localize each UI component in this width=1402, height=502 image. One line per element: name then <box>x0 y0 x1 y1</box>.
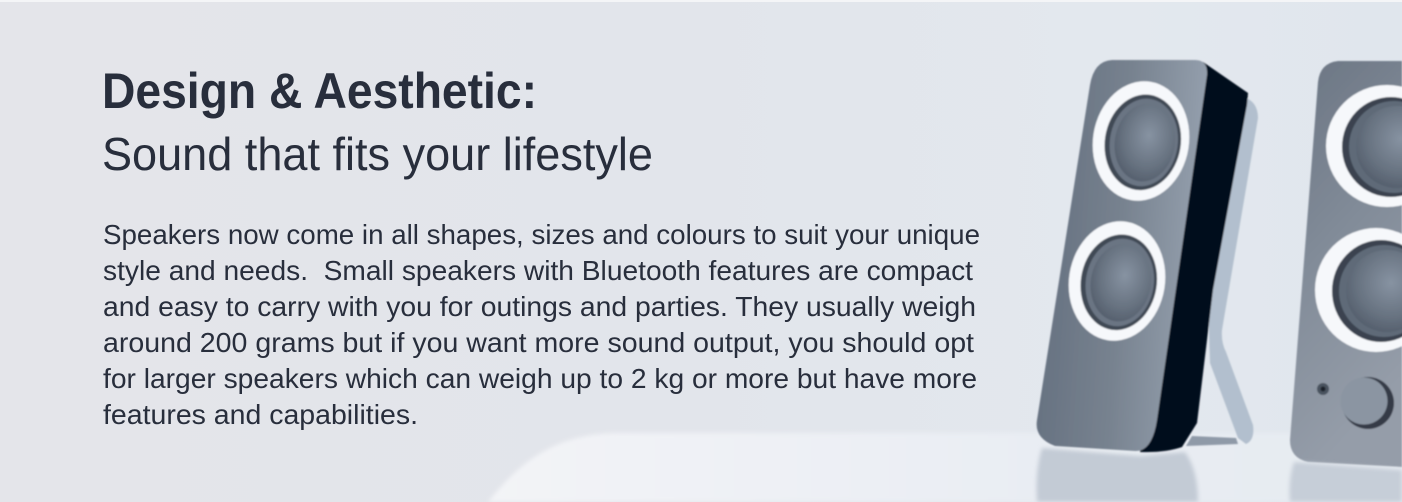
right speaker body <box>1290 61 1402 467</box>
upper driver <box>1326 85 1402 207</box>
speaker side panel <box>1140 62 1248 452</box>
body text: around 200 grams but if you want more sound output, you should opt <box>103 327 974 358</box>
title: Design & Aesthetic: <box>102 63 537 119</box>
table surface <box>488 433 1402 502</box>
volume knob <box>1340 377 1394 429</box>
body text: features and capabilities. <box>103 399 418 430</box>
subtitle: Sound that fits your lifestyle <box>102 128 653 180</box>
right speaker reflection <box>1290 462 1402 502</box>
audio jack <box>1317 383 1329 395</box>
lower driver <box>1060 214 1174 348</box>
upper driver <box>1084 74 1198 208</box>
body text: for larger speakers which can weigh up to 2 kg or more but have more <box>103 363 977 394</box>
body text: and easy to carry with you for outings and parties. They usually weigh <box>103 291 976 322</box>
body text <box>103 219 980 430</box>
body text: style and needs. Small speakers with Bluetooth features are compact <box>103 255 973 286</box>
speaker stand <box>1208 97 1258 444</box>
lower driver <box>1315 228 1402 352</box>
heading <box>102 63 653 180</box>
right speaker <box>1290 61 1402 467</box>
left speaker reflection <box>1037 448 1198 502</box>
body text: Speakers now come in all shapes, sizes and colours to suit your unique <box>103 219 980 250</box>
speaker front face <box>1037 60 1207 451</box>
left speaker <box>1037 60 1258 452</box>
